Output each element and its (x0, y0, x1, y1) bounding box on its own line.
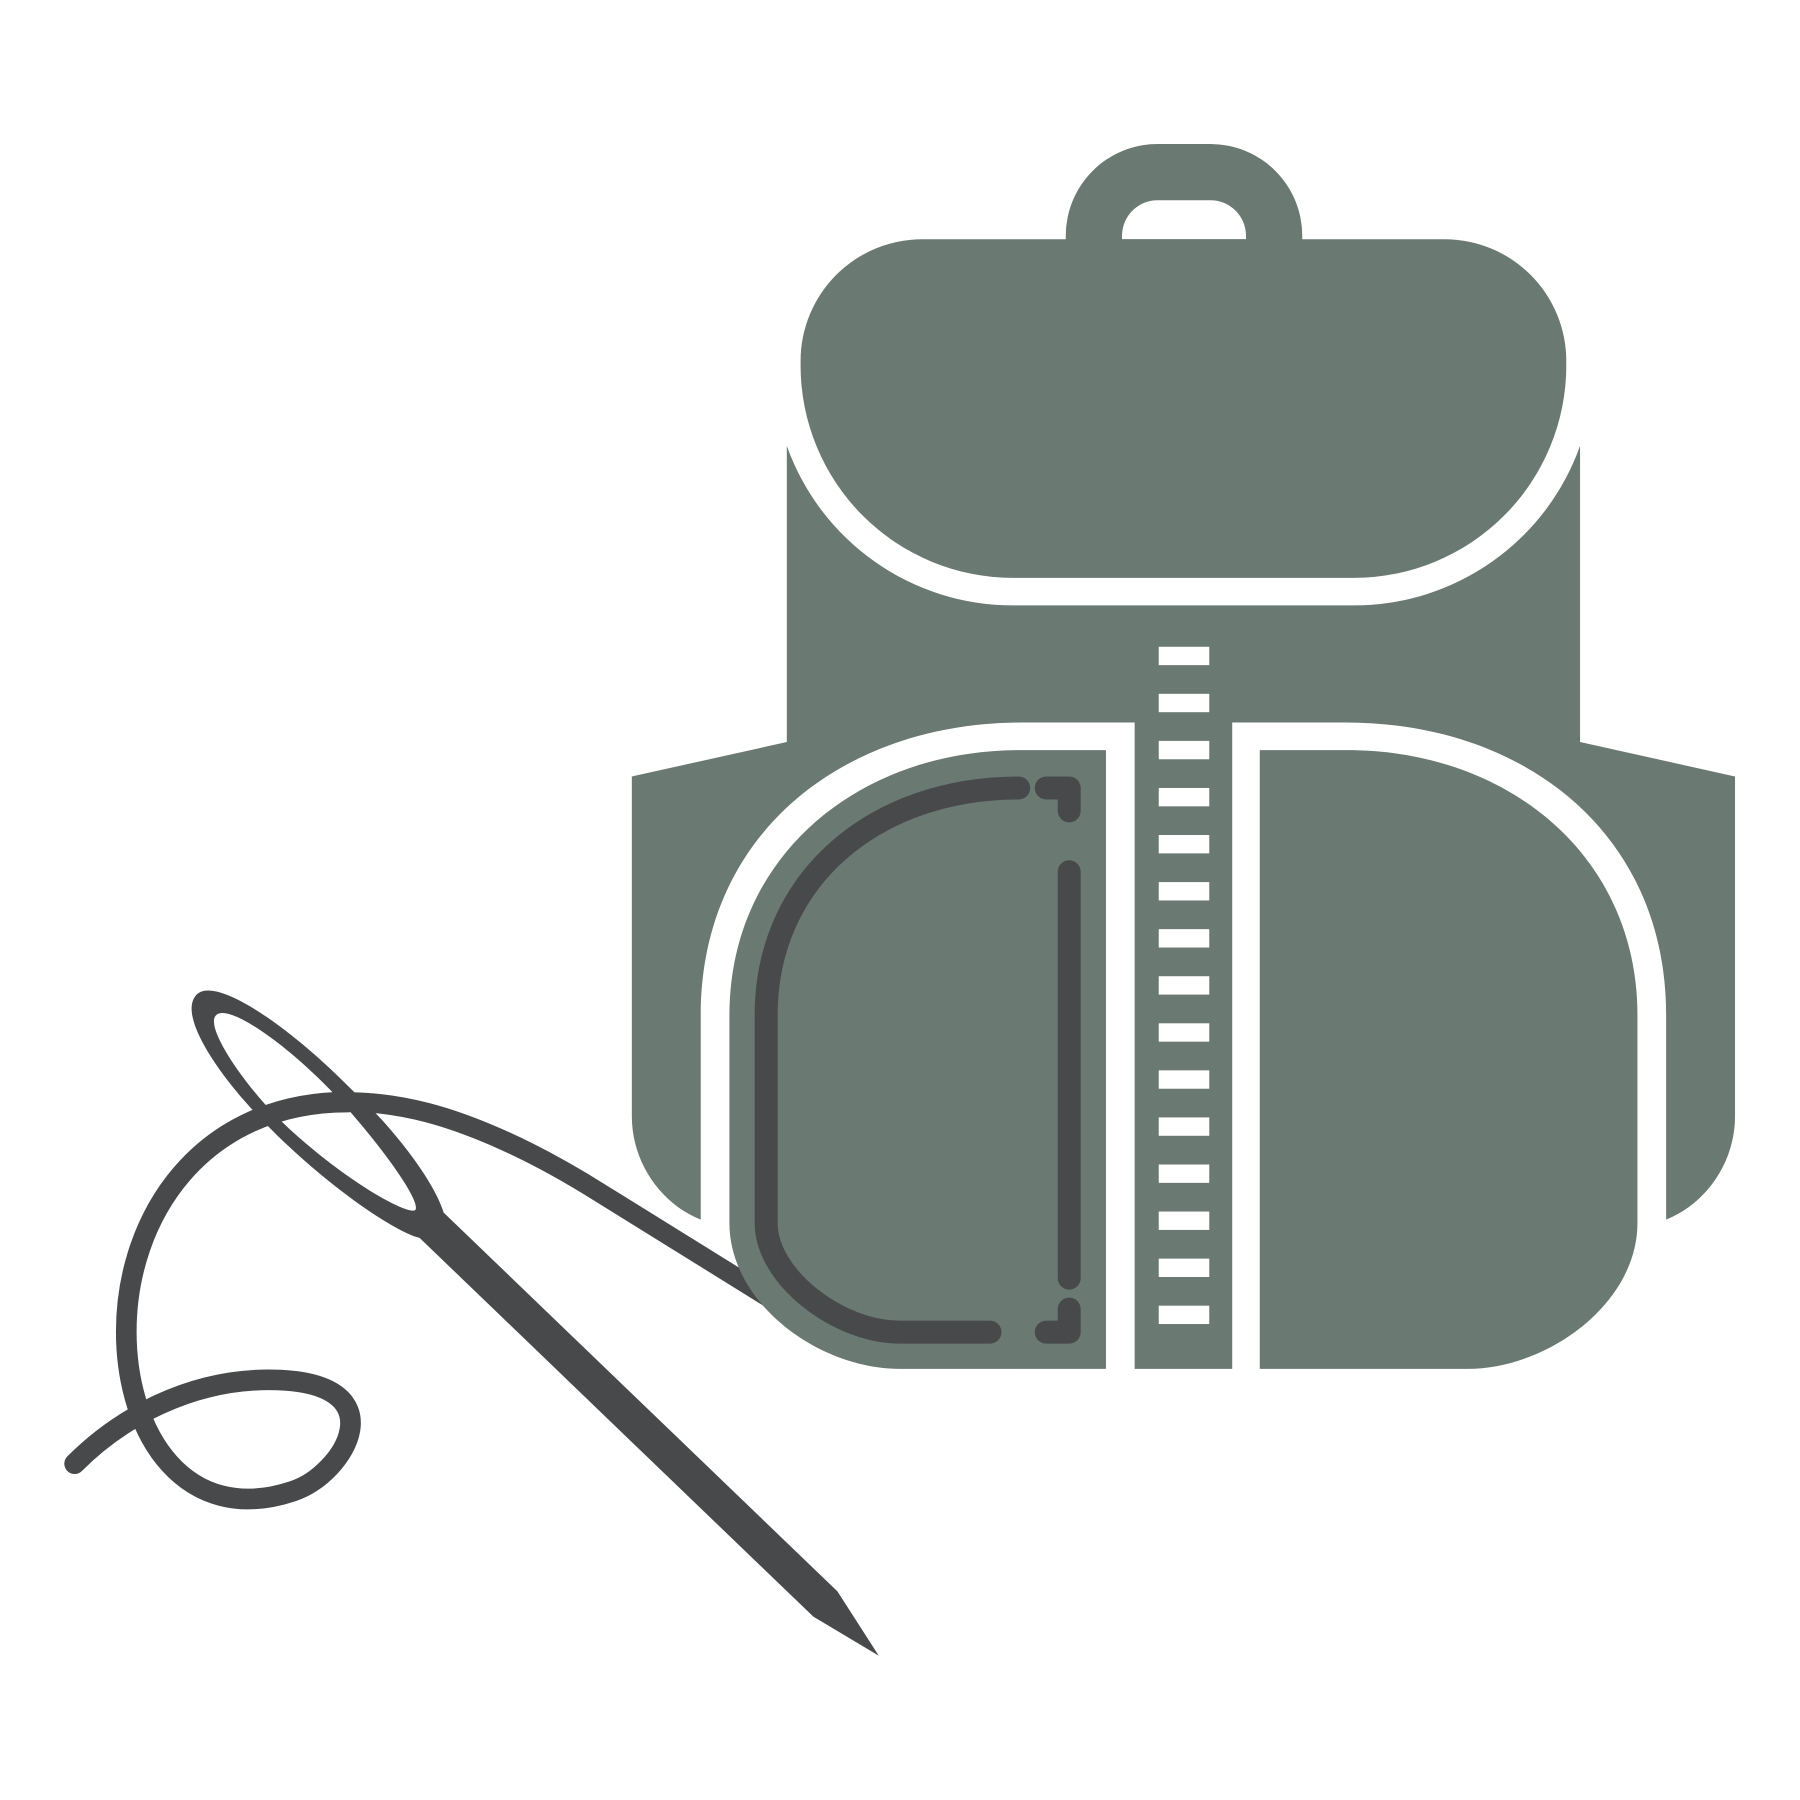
pocket stitching (766, 788, 1069, 1332)
top flap (801, 239, 1566, 578)
icon: needle (192, 990, 879, 1656)
zipper teeth (1159, 647, 1209, 1324)
icon: thread (75, 1102, 774, 1499)
illustration: backpack with needle and thread (64, 144, 1735, 1656)
top handle (1066, 144, 1302, 247)
left pocket (729, 750, 1106, 1369)
main body with side wings (632, 446, 1735, 1369)
right pocket (1260, 750, 1637, 1369)
backpack (632, 144, 1735, 1369)
